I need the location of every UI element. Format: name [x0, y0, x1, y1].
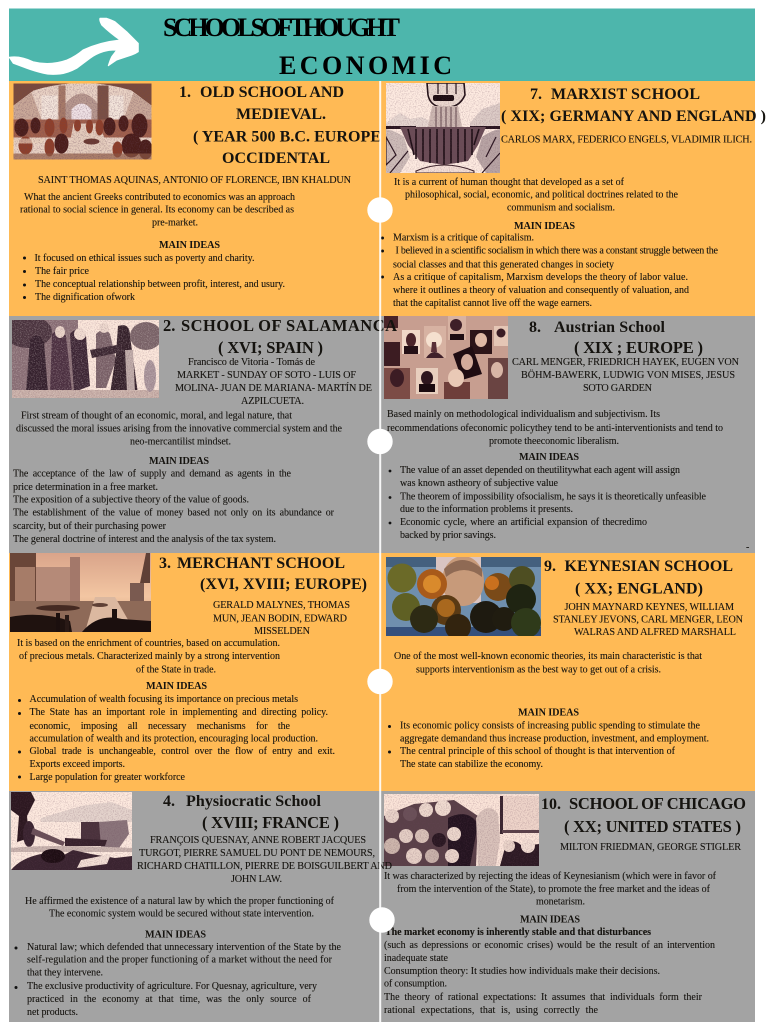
main ideas list: Economic cycle, where an artificial expansion of thecredimo	[400, 517, 647, 528]
main ideas list: (such as depressions or economic crises) would be the result of an intervention	[384, 940, 715, 951]
heading: ( XVI; SPAIN )	[218, 338, 323, 357]
authors: CARLOS MARX, FEDERICO ENGELS, VLADIMIR ILICH.	[501, 134, 752, 146]
main ideas list: backed by prior savings.	[400, 530, 496, 541]
description: neo-mercantilist mindset.	[130, 436, 231, 448]
heading: ( XVIII; FRANCE )	[202, 813, 339, 832]
authors: FRANÇOIS QUESNAY, ANNE ROBERT JACQUES	[150, 835, 366, 846]
authors: CARL MENGER, FRIEDRICH HAYEK, EUGEN VON	[512, 357, 740, 368]
timeline: central divider with circles	[367, 81, 395, 1022]
main ideas list: was known astheory of subjective value	[400, 478, 559, 489]
heading: KEYNESIAN SCHOOL	[564, 558, 733, 575]
heading: 9.	[544, 558, 556, 575]
authors	[512, 357, 740, 394]
description: of the State in trade.	[136, 664, 216, 676]
description: recommendations ofeconomic policythey tend to be anti-interventionists and tend to	[387, 423, 723, 434]
heading	[541, 794, 746, 836]
description	[387, 409, 723, 447]
main ideas list: The establishment of the value of money based not only on its abundance or	[13, 508, 335, 518]
heading: 4.	[163, 793, 175, 810]
heading: OLD SCHOOL AND	[200, 84, 344, 101]
heading: Austrian School	[554, 319, 666, 336]
description	[25, 896, 335, 920]
title: SCHOOLSOFTHOUGHT	[163, 13, 400, 42]
description	[384, 871, 717, 908]
heading: 3.	[159, 555, 171, 572]
heading: OCCIDENTAL	[222, 150, 330, 167]
description: pre-market.	[152, 218, 198, 228]
main ideas list: The exposition of a subjective theory of the value of goods.	[13, 494, 249, 506]
main ideas list: where it outlines a theory of valuation and consequently of valuation, and	[393, 285, 689, 296]
main ideas list: The conceptual relationship between profit, interest, and usury.	[35, 279, 285, 290]
description: It is a current of human thought that developed as a set of	[394, 177, 625, 188]
description: What the ancient Greeks contributed to economics was an approach	[24, 192, 295, 203]
main ideas list	[18, 694, 335, 783]
description	[394, 177, 679, 214]
heading: Physiocratic School	[186, 793, 322, 810]
heading	[179, 84, 381, 167]
heading: 8.	[529, 319, 541, 336]
main ideas heading: MAIN IDEAS	[519, 452, 579, 463]
heading	[159, 555, 367, 593]
main ideas list: I believed in a scientific socialism in which there was a constant struggle between the	[396, 246, 719, 256]
heading	[529, 319, 703, 357]
description: It is based on the enrichment of countries, based on accumulation.	[17, 638, 280, 649]
authors: MILTON FRIEDMAN, GEORGE STIGLER	[560, 842, 741, 853]
main ideas list: that the capitalist cannot live off the wage earners.	[393, 298, 592, 309]
heading	[163, 793, 339, 832]
main ideas list: The theory of rational expectations: It assumes that individuals form their	[384, 992, 703, 1003]
main ideas list: practiced in the economy at that time, was the only source of	[27, 994, 312, 1005]
authors: MARKET - SUNDAY OF SOTO - LUIS OF	[177, 370, 356, 381]
main ideas list: The theorem of impossibility ofsocialism, he says it is theoretically unfeasible	[400, 492, 707, 502]
main ideas list: Its economic policy consists of increasing public spending to stimulate the	[400, 720, 701, 732]
image: school of athens	[14, 84, 152, 160]
image: coins on a hundred dollar bill	[386, 557, 541, 636]
authors: WALRAS AND ALFRED MARSHALL	[574, 627, 736, 638]
heading: ( XIX ; EUROPE )	[574, 338, 703, 357]
heading: SCHOOL OF SALAMANCA	[181, 316, 397, 335]
authors: MUN, JEAN BODIN, EDWARD	[213, 614, 347, 624]
image: portrait collage of economists	[384, 316, 508, 399]
main ideas list: The fair price	[35, 266, 90, 277]
main ideas list	[388, 720, 709, 770]
main ideas list: Marxism is a critique of capitalism.	[393, 232, 534, 244]
main ideas list: inadequate state	[384, 953, 449, 964]
authors: MISSELDEN	[254, 626, 311, 637]
main ideas list: The general doctrine of interest and the analysis of the tax system.	[13, 534, 276, 545]
main ideas list: The State has an important role in implementing and directing policy.	[30, 707, 328, 718]
main ideas list: Global trade is unchangeable, control over the flow of entry and exit.	[30, 746, 335, 757]
main ideas list: The acceptance of the law of supply and demand as agents in the	[13, 468, 292, 480]
image: friar with villagers engraving	[12, 320, 159, 398]
authors: JOHN LAW.	[231, 874, 282, 885]
main ideas list: Natural law; which defended that unnecessary intervention of the State by the	[27, 942, 342, 953]
main ideas list: The exclusive productivity of agriculture. For Quesnay, agriculture, very	[27, 981, 317, 992]
panel: 1 old school and medieval	[9, 81, 381, 316]
authors	[213, 600, 350, 637]
heading: ( YEAR 500 B.C. EUROPE	[193, 128, 381, 146]
heading: ( XX; UNITED STATES )	[564, 817, 741, 836]
main ideas list: accumulation of wealth and its protection, encouraging local production.	[30, 734, 318, 744]
main ideas list: Consumption theory: It studies how individuals make their decisions.	[384, 966, 660, 977]
stray dash: -	[746, 542, 749, 553]
main ideas list	[381, 232, 719, 309]
main ideas list: Exports exceed imports.	[30, 759, 125, 770]
panel: 4 physiocratic school	[9, 791, 392, 1022]
authors	[137, 835, 392, 885]
main ideas list	[13, 468, 335, 545]
main ideas list: self-regulation and the proper functioning of a market without the need for	[27, 954, 333, 966]
description: rational to social science in general. Its economy can be described as	[20, 204, 294, 216]
authors: MOLINA- JUAN DE MARIANA- MARTÍN DE	[175, 382, 372, 394]
main ideas list: scarcity, but of their purchasing power	[13, 521, 167, 532]
description: promote theeconomic liberalism.	[489, 436, 619, 447]
main ideas list: that they intervene.	[27, 968, 103, 978]
authors: AZPILCUETA.	[241, 396, 304, 407]
header banner	[9, 8, 755, 82]
description: supports interventionism as the best way to get out of a crisis.	[416, 664, 661, 676]
description: of precious metals. Characterized mainly by a strong intervention	[19, 651, 280, 662]
description: Based mainly on methodological individualism and subjectivism. Its	[387, 409, 660, 420]
description: philosophical, social, economic, and political doctrines related to the	[405, 190, 679, 200]
panel: 2 school of salamanca	[4, 316, 397, 553]
authors: GERALD MALYNES, THOMAS	[213, 600, 350, 611]
main ideas list: of consumption.	[384, 978, 447, 990]
authors: JOHN MAYNARD KEYNES, WILLIAM	[564, 602, 734, 613]
main ideas list: net products.	[27, 1007, 78, 1018]
main ideas list: aggregate demandand thus increase production, investment, and employment.	[400, 734, 709, 744]
main ideas list: due to the information problems it presents.	[400, 504, 573, 515]
description: It was characterized by rejecting the ideas of Keynesianism (which were in favor of	[384, 871, 717, 882]
main ideas heading: MAIN IDEAS	[514, 221, 575, 232]
main ideas list: economic, imposing all necessary mechanisms for the	[30, 721, 291, 732]
image: harbour at sunset	[10, 553, 151, 632]
heading	[544, 558, 733, 598]
image: ploughing oxen engraving	[11, 792, 132, 870]
main ideas list	[389, 465, 707, 541]
main ideas heading: MAIN IDEAS	[159, 240, 220, 251]
main ideas list: Large population for greater workforce	[30, 772, 186, 783]
main ideas heading: MAIN IDEAS	[149, 456, 209, 467]
heading: (XVI, XVIII; EUROPE)	[200, 576, 367, 593]
main ideas list	[23, 253, 285, 303]
heading: 1.	[179, 84, 191, 101]
heading	[163, 316, 397, 357]
panel: 9 keynesian school	[380, 553, 755, 791]
main ideas list: The dignification ofwork	[35, 292, 135, 303]
title	[163, 13, 452, 80]
authors: RICHARD CHATILLON, PIERRE DE BOISGUILBERT AND	[137, 861, 392, 872]
main ideas list: It focused on ethical issues such as poverty and charity.	[34, 253, 254, 264]
icon: white brush arrow	[9, 18, 138, 74]
authors: SOTO GARDEN	[583, 383, 653, 394]
main ideas list: As a critique of capitalism, Marxism develops the theory of labor value.	[393, 272, 688, 283]
main ideas list: The central principle of this school of thought is that intervention of	[400, 746, 676, 757]
heading: 2.	[163, 316, 175, 335]
description: One of the most well-known economic theories, its main characteristic is that	[394, 651, 702, 662]
main ideas list: Accumulation of wealth focusing its importance on precious metals	[30, 694, 298, 705]
panel: 10 school of chicago	[380, 791, 755, 1022]
main ideas list: price determination in a free market.	[13, 482, 158, 493]
heading: MEDIEVAL.	[236, 106, 326, 123]
heading: ( XIX; GERMANY AND ENGLAND )	[501, 108, 766, 125]
heading: SCHOOL OF CHICAGO	[569, 794, 746, 813]
description: communism and socialism.	[507, 202, 615, 214]
heading	[501, 86, 766, 125]
description	[20, 192, 295, 228]
description: First stream of thought of an economic, moral, and legal nature, that	[21, 410, 292, 422]
image: group of economists engraving	[384, 794, 539, 866]
panel: 3 merchant school	[9, 553, 380, 791]
description	[16, 410, 343, 448]
heading: ( XX; ENGLAND)	[575, 580, 703, 598]
panel: 7 marxist school	[380, 81, 766, 316]
main ideas list: The state can stabilize the economy.	[400, 759, 543, 770]
authors	[175, 357, 372, 407]
heading: MERCHANT SCHOOL	[177, 555, 345, 572]
panel: 8 austrian school	[380, 316, 755, 553]
description: He affirmed the existence of a natural law by which the proper functioning of	[25, 896, 335, 907]
main ideas list: The market economy is inherently stable and that disturbances	[385, 927, 651, 938]
main ideas heading: MAIN IDEAS	[518, 708, 579, 718]
description: from the intervention of the State), to promote the free market and the ideas of	[397, 884, 711, 895]
authors: TURGOT, PIERRE SAMUEL DU PONT DE NEMOURS,	[139, 848, 375, 859]
authors: STANLEY JEVONS, CARL MENGER, LEON	[553, 614, 744, 626]
main ideas heading: MAIN IDEAS	[145, 930, 206, 940]
authors	[553, 602, 744, 638]
description	[17, 638, 280, 676]
authors: BÖHM-BAWERK, LUDWIG VON MISES, JESUS	[521, 369, 735, 381]
authors: Francisco de Vitoria - Tomás de	[188, 357, 315, 368]
main ideas list	[14, 942, 342, 1018]
description: discussed the moral issues arising from the innovative commercial system and the	[16, 424, 343, 434]
description: monetarism.	[536, 896, 585, 908]
authors: SAINT THOMAS AQUINAS, ANTONIO OF FLORENCE, IBN KHALDUN	[38, 175, 352, 186]
main ideas heading: MAIN IDEAS	[520, 914, 580, 926]
main ideas list	[384, 927, 715, 1016]
heading: 10.	[541, 796, 561, 813]
main ideas heading: MAIN IDEAS	[146, 681, 207, 692]
description	[394, 651, 702, 676]
heading: MARXIST SCHOOL	[551, 86, 700, 103]
image: fist over crowd	[386, 83, 500, 173]
main ideas list: rational expectations, that is, using correctly the	[384, 1005, 599, 1016]
heading: 7.	[530, 86, 542, 103]
title: ECONOMIC	[279, 51, 452, 80]
main ideas list: social classes and that this generated changes in society	[393, 260, 614, 270]
description: The economic system would be secured without state intervention.	[49, 908, 314, 920]
main ideas list: The value of an asset depended on theutilitywhat each agent will assign	[400, 465, 680, 476]
